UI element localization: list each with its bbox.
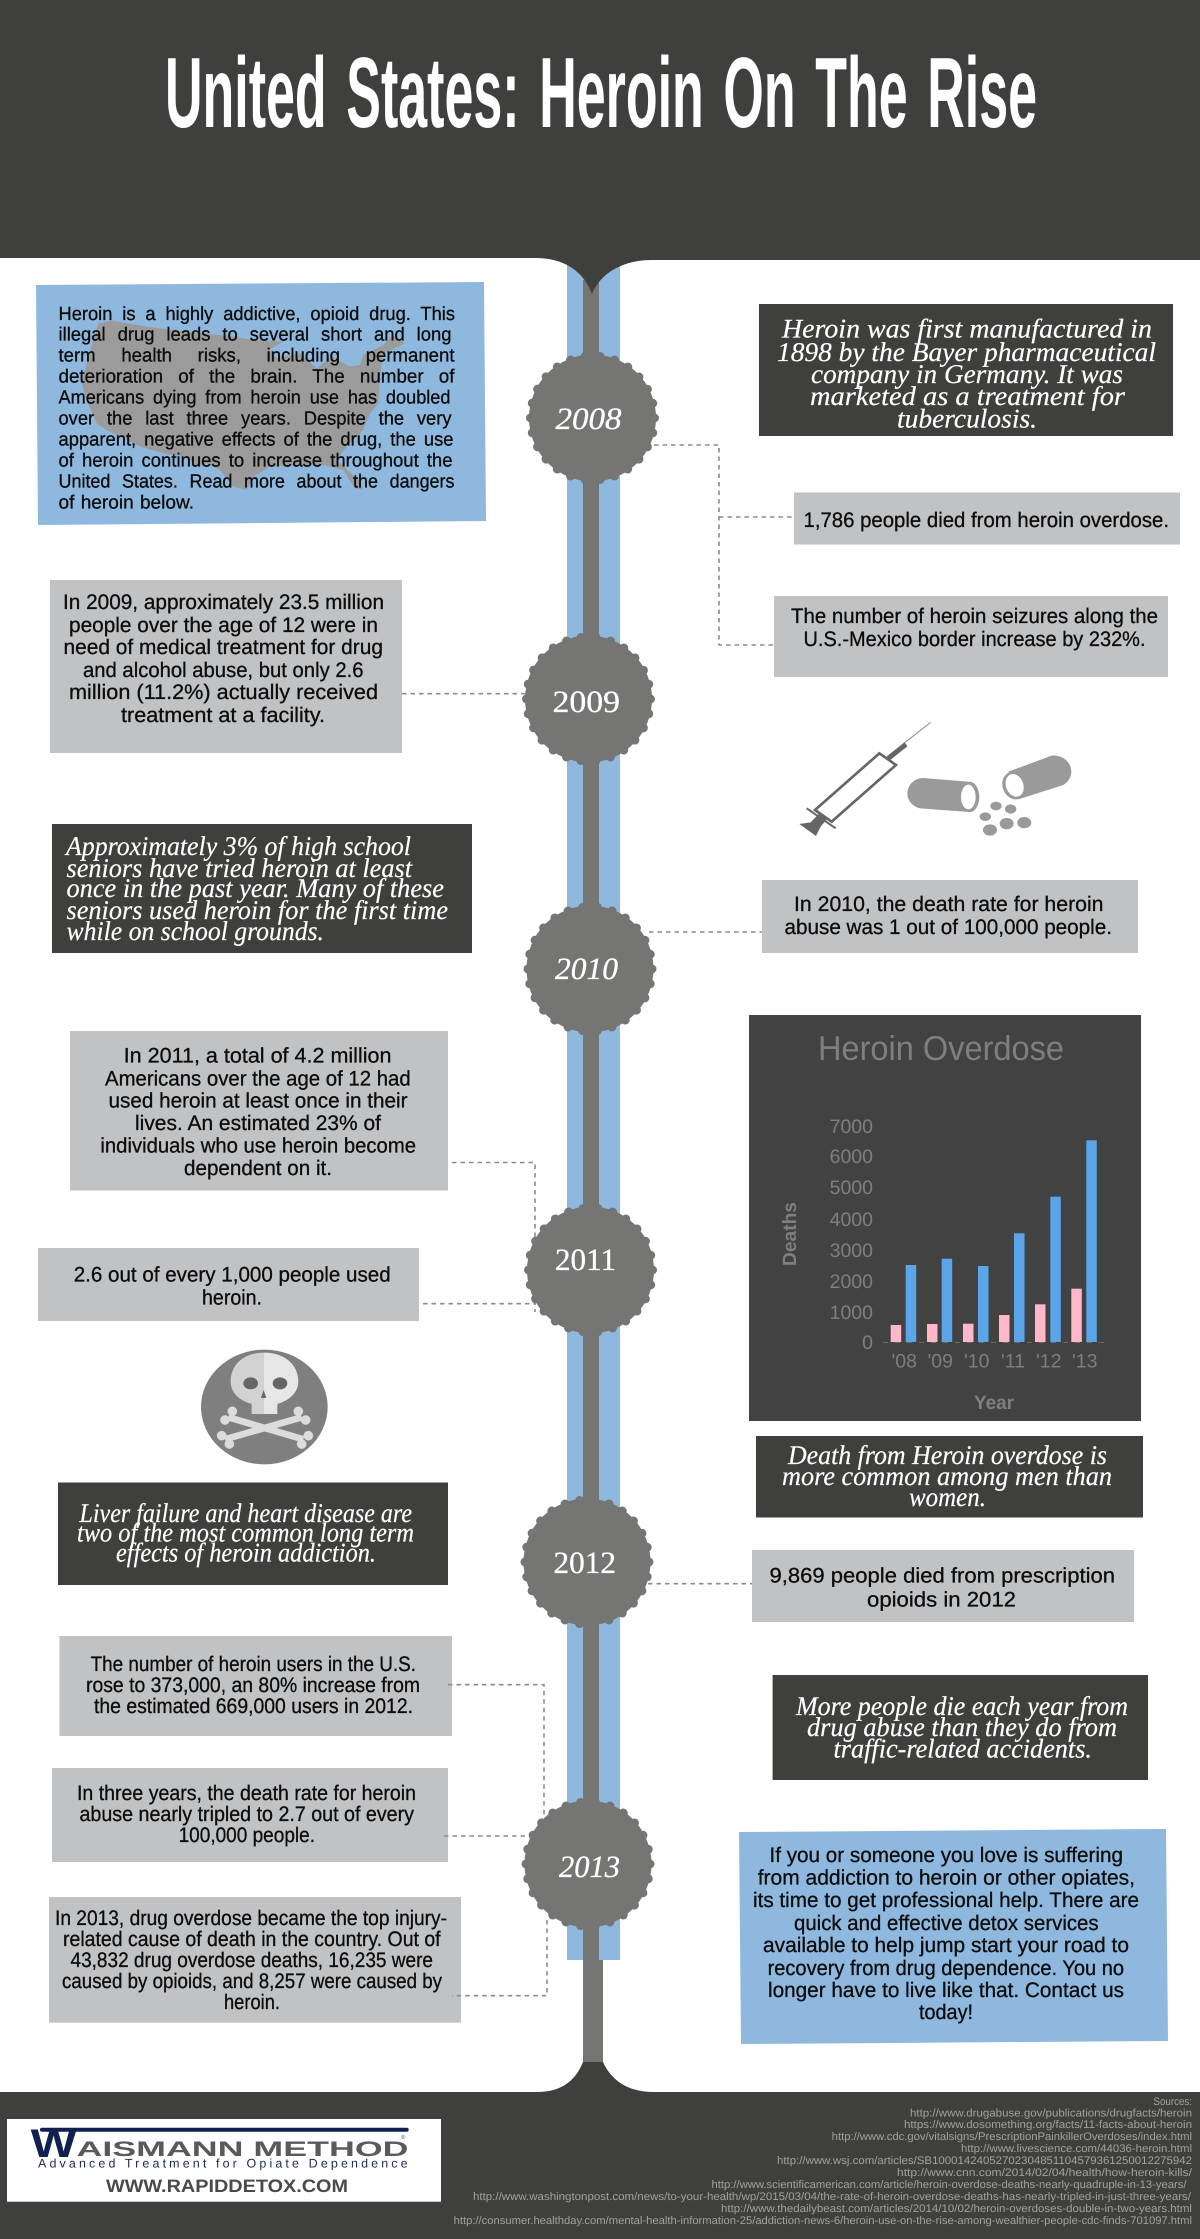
y axis labels xyxy=(830,1116,873,1354)
badge: 2012 xyxy=(524,1498,650,1626)
x axis labels: '13 xyxy=(1072,1351,1097,1373)
sources list: http://www.cdc.gov/vitalsigns/PrescriptionPainkillerOverdoses/index.html xyxy=(832,2131,1192,2143)
sources list: http://www.scientificamerican.com/article/heroin-overdose-deaths-nearly-quadruple-in-13-years/ xyxy=(712,2179,1187,2191)
fact: 2013 death rate: abuse nearly tripled to 2.7 out of every xyxy=(80,1803,414,1826)
fact: 2009 treatment: million (11.2%) actually received xyxy=(69,681,378,704)
fact: 2013 users: the estimated 669,000 users in 2012. xyxy=(94,1695,413,1718)
badge: 2009: 2009 xyxy=(552,684,620,719)
intro text: over the last three years. Despite the very xyxy=(58,409,452,430)
fact: prescription opioids xyxy=(752,1550,1134,1622)
callout: men versus women xyxy=(756,1436,1143,1518)
callout: traffic accidents: traffic-related accidents. xyxy=(834,1734,1092,1764)
fact: 2008 deaths: 1,786 people died from heroin overdose. xyxy=(804,509,1169,532)
badge: 2013 xyxy=(524,1800,652,1928)
pink bars xyxy=(891,1289,1082,1342)
fact: 2011 rate: heroin. xyxy=(202,1286,262,1310)
fact: 2010 death rate xyxy=(762,880,1138,953)
y axis labels: 6000 xyxy=(830,1146,873,1168)
fact: 2011 rate xyxy=(38,1248,419,1321)
x axis labels xyxy=(892,1351,1097,1373)
badge: 2010 xyxy=(526,906,654,1032)
connector: 2012 xyxy=(648,1583,752,1585)
fact: 2011 users: Americans over the age of 12 had xyxy=(105,1067,411,1090)
panel: call to action: longer have to live like that. Contact us xyxy=(768,1979,1124,2002)
callout: high school seniors: while on school grounds. xyxy=(66,916,324,946)
fact: 2008 deaths xyxy=(794,492,1180,544)
connector: 2013 xyxy=(444,1685,547,1996)
panel: call to action: available to help jump start your road to xyxy=(763,1934,1129,1957)
fact: 2013 overdose: heroin. xyxy=(224,1991,280,2014)
panel: call to action: today! xyxy=(919,2001,973,2024)
fact: 2013 overdose xyxy=(49,1897,461,2023)
fact: 2009 treatment: and alcohol abuse, but only 2.6 xyxy=(83,659,364,682)
panel: call to action: quick and effective detox services xyxy=(794,1912,1099,1935)
fact: 2011 users: lives. An estimated 23% of xyxy=(135,1112,381,1135)
callout: high school seniors: Approximately 3% of high school xyxy=(64,831,411,861)
connector: 2011 xyxy=(423,1162,535,1312)
callout: liver failure: effects of heroin addiction. xyxy=(116,1538,376,1568)
fact: prescription opioids: 9,869 people died from prescription xyxy=(770,1564,1115,1587)
y axis labels: 3000 xyxy=(830,1240,873,1262)
fact: 2011 rate: 2.6 out of every 1,000 people used xyxy=(74,1264,391,1286)
chart title: Heroin Overdose xyxy=(818,1030,1064,1068)
logo: Waismann Method: Advanced Treatment for Opiate Dependence xyxy=(38,2156,408,2170)
timeline band xyxy=(567,258,620,2075)
fact: 2013 overdose: In 2013, drug overdose became the top injury- xyxy=(55,1907,447,1930)
callout: liver failure: Liver failure and heart disease are xyxy=(79,1498,412,1528)
fact: 2011 users: used heroin at least once in their xyxy=(108,1090,408,1113)
callout: traffic accidents: More people die each year from xyxy=(795,1691,1128,1721)
callout: traffic accidents xyxy=(773,1675,1148,1780)
intro text: of heroin continues to increase throughout the xyxy=(58,451,452,472)
badge: 2011: 2011 xyxy=(555,1242,616,1277)
intro text: of heroin below. xyxy=(58,492,194,513)
y axis labels: 7000 xyxy=(830,1116,873,1138)
header background xyxy=(0,0,1200,294)
fact: 2009 treatment: need of medical treatment for drug xyxy=(64,636,383,659)
fact: 2013 death rate: In three years, the death rate for heroin xyxy=(77,1782,416,1805)
fact: 2013 users: The number of heroin users in the U.S. xyxy=(91,1653,416,1676)
badge: 2008: 2008 xyxy=(556,401,622,436)
callout: men versus women: women. xyxy=(909,1482,986,1512)
right capsule xyxy=(999,756,1071,803)
fact: 2013 users: rose to 373,000, an 80% increase from xyxy=(86,1674,420,1697)
intro text: United States. Read more about the dangers xyxy=(58,472,454,493)
sources list: Sources: xyxy=(1154,2096,1192,2108)
fact: 2009 treatment: people over the age of 12 were in xyxy=(69,614,378,637)
fact: 2013 users xyxy=(59,1636,452,1736)
intro text xyxy=(58,304,455,513)
sources list: http://www.thedailybeast.com/articles/2014/10/02/heroin-overdoses-double-in-two-years.html xyxy=(721,2203,1192,2215)
fact: 2013 death rate xyxy=(52,1768,448,1862)
callout: high school seniors: once in the past year. Many of these xyxy=(66,873,444,903)
callout: liver failure: two of the most common long term xyxy=(77,1518,414,1548)
crossbones xyxy=(217,1407,313,1449)
panel: call to action: recovery from drug dependence. You no xyxy=(768,1957,1124,1980)
fact: 2011 users: dependent on it. xyxy=(184,1157,332,1180)
y axis labels: 4000 xyxy=(830,1209,873,1231)
fact: 2009 treatment: treatment at a facility. xyxy=(121,704,325,727)
callout: first manufactured: company in Germany. It was xyxy=(811,359,1123,389)
logo: Waismann Method xyxy=(7,2119,441,2202)
left capsule xyxy=(907,778,979,812)
badge: 2012: 2012 xyxy=(554,1545,616,1580)
fact: border seizures: U.S.-Mexico border increase by 232%. xyxy=(804,628,1146,651)
callout: first manufactured xyxy=(759,304,1173,436)
sources list: https://www.dosomething.org/facts/11-facts-about-heroin xyxy=(904,2119,1192,2131)
badge: 2011 xyxy=(527,1206,654,1334)
intro text: illegal drug leads to several short and long xyxy=(58,325,452,346)
fact: border seizures xyxy=(774,596,1168,677)
footer background xyxy=(0,2062,1200,2239)
badge: 2008 xyxy=(529,354,656,482)
sources list xyxy=(454,2096,1193,2227)
fact: 2010 death rate: In 2010, the death rate for heroin xyxy=(794,893,1104,916)
callout: high school seniors: seniors have tried heroin at least xyxy=(66,853,413,883)
fact: 2011 users: In 2011, a total of 4.2 million xyxy=(124,1044,391,1068)
sources list: http://www.livescience.com/44036-heroin.html xyxy=(961,2143,1192,2155)
sources list: http://consumer.healthday.com/mental-health-information-25/addiction-news-6/heroin-use-on-the-rise-among-wealthier-people-cdc-finds-701097.html xyxy=(454,2215,1192,2227)
intro text: apparent, negative effects of the drug, the use xyxy=(58,430,454,451)
panel: introduction xyxy=(36,282,486,525)
fact: 2013 death rate: 100,000 people. xyxy=(179,1824,315,1847)
y axis labels: 0 xyxy=(862,1332,873,1354)
callout: first manufactured: tuberculosis. xyxy=(897,404,1037,434)
connector: 2010 xyxy=(649,931,762,933)
x axis labels: '08 xyxy=(892,1351,917,1373)
callout: first manufactured: marketed as a treatment for xyxy=(810,381,1126,411)
callout: high school seniors: seniors used heroin for the first time xyxy=(66,895,448,925)
syringe xyxy=(799,722,931,836)
fact: 2013 overdose: related cause of death in the country. Out of xyxy=(63,1928,441,1951)
intro text: Heroin is a highly addictive, opioid drug. This xyxy=(58,304,455,325)
blue bars xyxy=(906,1140,1097,1342)
icon: US map xyxy=(82,321,405,490)
panel: call to action: from addiction to heroin or other opiates, xyxy=(758,1866,1135,1890)
badge: 2013: 2013 xyxy=(559,1849,620,1884)
connector: 2009 xyxy=(402,693,525,695)
skull xyxy=(231,1353,264,1414)
panel: call to action: its time to get professional help. There are xyxy=(753,1889,1139,1912)
fact: 2009 treatment xyxy=(50,580,402,753)
x axis labels: '12 xyxy=(1036,1351,1061,1373)
y axis title: Deaths xyxy=(780,1202,801,1266)
icon: skull and crossbones xyxy=(201,1350,328,1464)
panel: call to action: If you or someone you love is suffering xyxy=(770,1844,1123,1867)
fact: 2011 users xyxy=(70,1031,448,1190)
fact: 2009 treatment: In 2009, approximately 23.5 million xyxy=(63,591,384,614)
fact: 2013 overdose: caused by opioids, and 8,257 were caused by xyxy=(62,1970,442,1993)
logo: Waismann Method: W xyxy=(31,2122,77,2166)
sources list: http://www.wsj.com/articles/SB10001424052702304851104579361250012275942 xyxy=(777,2155,1192,2167)
pills xyxy=(980,802,1031,836)
badge: 2009 xyxy=(525,636,652,762)
logo: Waismann Method: ® xyxy=(401,2134,406,2141)
intro text: Americans dying from heroin use has doubled xyxy=(58,388,450,409)
x axis labels: '09 xyxy=(928,1351,953,1373)
panel: call to action xyxy=(739,1829,1168,2044)
y axis labels: 1000 xyxy=(830,1302,873,1324)
callout: high school seniors xyxy=(52,824,472,953)
x axis title: Year xyxy=(974,1392,1014,1414)
y axis labels: 5000 xyxy=(830,1177,873,1199)
icon: syringe and capsules xyxy=(799,722,1071,836)
intro text: term health risks, including permanent xyxy=(58,346,455,367)
callout: first manufactured: Heroin was first manufactured in xyxy=(781,314,1152,344)
logo: Waismann Method: WWW.RAPIDDETOX.COM xyxy=(106,2176,348,2196)
fact: border seizures: The number of heroin seizures along the xyxy=(791,605,1158,628)
logo: Waismann Method: AISMANN METHOD xyxy=(76,2138,408,2161)
callout: liver failure xyxy=(58,1482,448,1585)
y axis labels: 2000 xyxy=(830,1271,873,1293)
fact: prescription opioids: opioids in 2012 xyxy=(867,1588,1016,1612)
callout: first manufactured: 1898 by the Bayer pharmaceutical xyxy=(777,337,1156,367)
intro text: deterioration of the brain. The number of xyxy=(58,367,455,388)
x axis labels: '10 xyxy=(964,1351,990,1373)
sources list: http://www.cnn.com/2014/02/04/health/how-heroin-kills/ xyxy=(897,2167,1193,2179)
x axis labels: '11 xyxy=(1001,1351,1025,1373)
connector: 2008 xyxy=(654,445,794,645)
callout: men versus women: Death from Heroin overdose is xyxy=(787,1440,1107,1470)
sources list: http://www.drugabuse.gov/publications/drugfacts/heroin xyxy=(910,2108,1192,2120)
callout: men versus women: more common among men than xyxy=(782,1461,1112,1491)
sources list: http://www.washingtonpost.com/news/to-your-health/wp/2015/03/04/the-rate-of-heroin-overdose-deaths-has-nearly-tripled-in-just-three-years/ xyxy=(473,2191,1192,2203)
badge: 2010: 2010 xyxy=(555,951,619,986)
bar chart: heroin overdose xyxy=(749,1015,1141,1421)
fact: 2011 users: individuals who use heroin become xyxy=(100,1135,416,1158)
fact: 2013 overdose: 43,832 drug overdose deaths, 16,235 were xyxy=(70,1949,433,1972)
fact: 2010 death rate: abuse was 1 out of 100,000 people. xyxy=(784,916,1112,939)
callout: traffic accidents: drug abuse than they do from xyxy=(807,1712,1117,1742)
